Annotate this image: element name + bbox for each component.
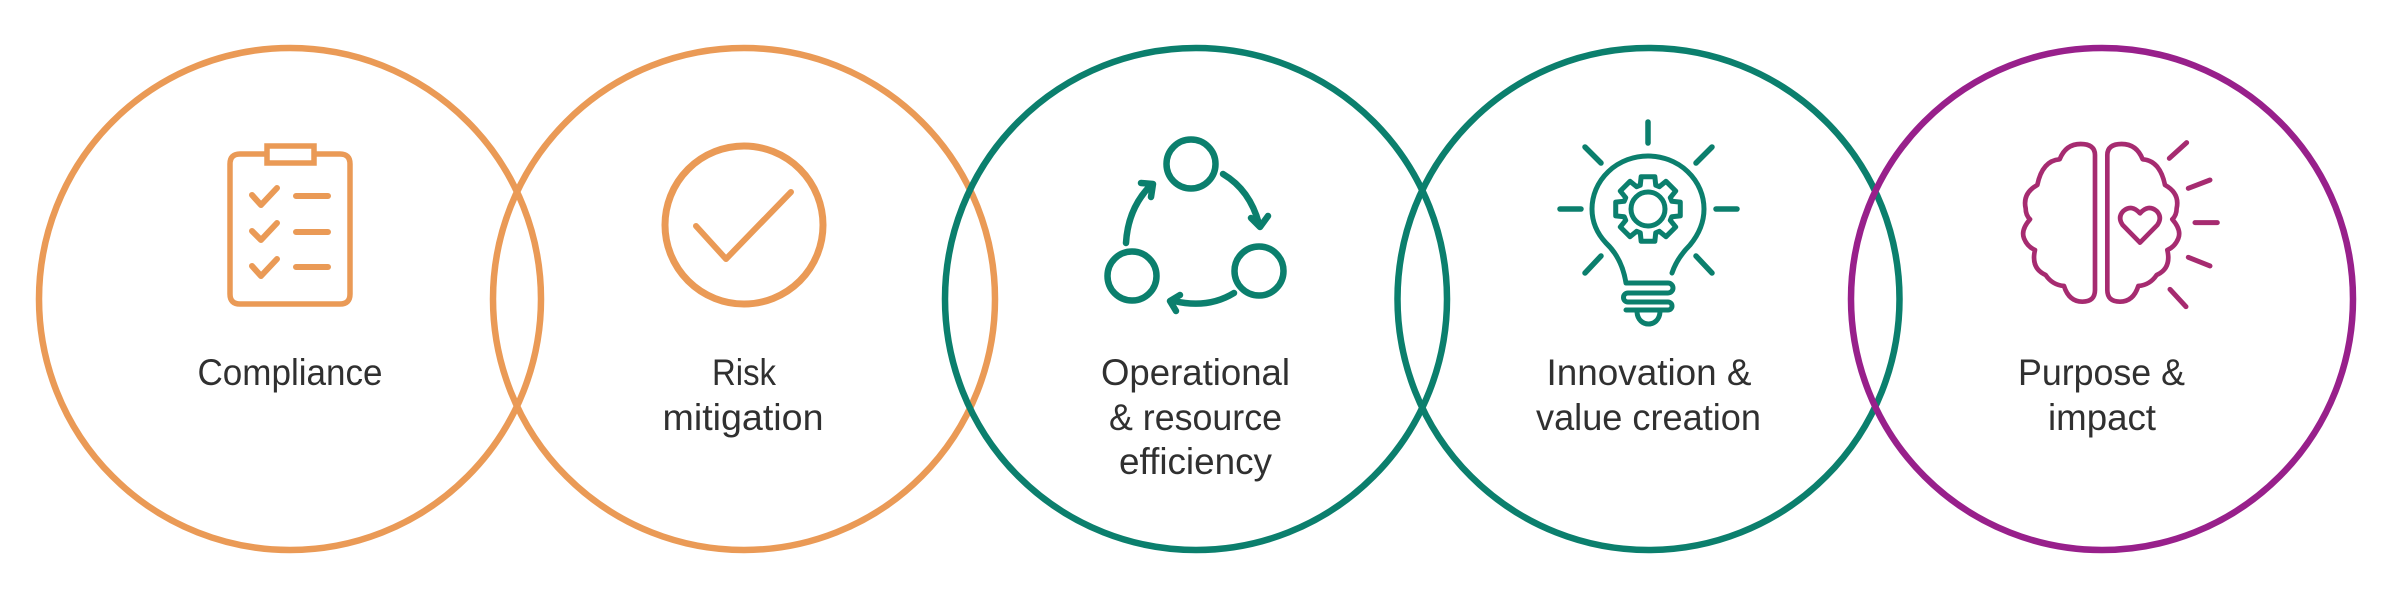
ring: compliance: [39, 48, 541, 550]
ring: purpose and impact: [1851, 48, 2353, 550]
label: Risk mitigation: mitigation: [662, 397, 824, 438]
panel: risk mitigation: [493, 48, 995, 550]
label: Operational and resource efficiency: Operational: [1101, 352, 1290, 393]
ring: operational and resource efficiency: [945, 48, 1447, 550]
label: Risk mitigation: Risk: [712, 352, 776, 393]
label: Operational and resource efficiency: efficiency: [1119, 441, 1272, 482]
icon: light bulb with gear: [1560, 122, 1737, 324]
ring: innovation and value creation: [1398, 48, 1900, 550]
label: Operational and resource efficiency: & resource: [1109, 397, 1282, 438]
icon: check in circle: [665, 146, 823, 304]
label: Innovation and value creation: Innovation &: [1546, 352, 1752, 393]
ring: risk mitigation: [493, 48, 995, 550]
label: Purpose and impact: [2018, 352, 2185, 438]
label: Innovation and value creation: value creation: [1536, 397, 1761, 438]
label: Purpose and impact: Purpose &: [2018, 352, 2185, 393]
icon: three-node cycle: [1108, 140, 1284, 311]
label: Innovation and value creation: [1536, 352, 1761, 438]
icon: brain with heart: [2023, 143, 2217, 307]
label: Compliance: Compliance: [198, 352, 382, 393]
label: Risk mitigation: [662, 352, 824, 438]
panel: purpose and impact: [1851, 48, 2353, 550]
icon: clipboard checklist: [230, 146, 350, 304]
label: Operational and resource efficiency: [1101, 352, 1290, 482]
panel: compliance: [39, 48, 541, 550]
label: Purpose and impact: impact: [2048, 397, 2157, 438]
panel: innovation and value creation: [1398, 48, 1900, 550]
panel: operational and resource efficiency: [945, 48, 1447, 550]
